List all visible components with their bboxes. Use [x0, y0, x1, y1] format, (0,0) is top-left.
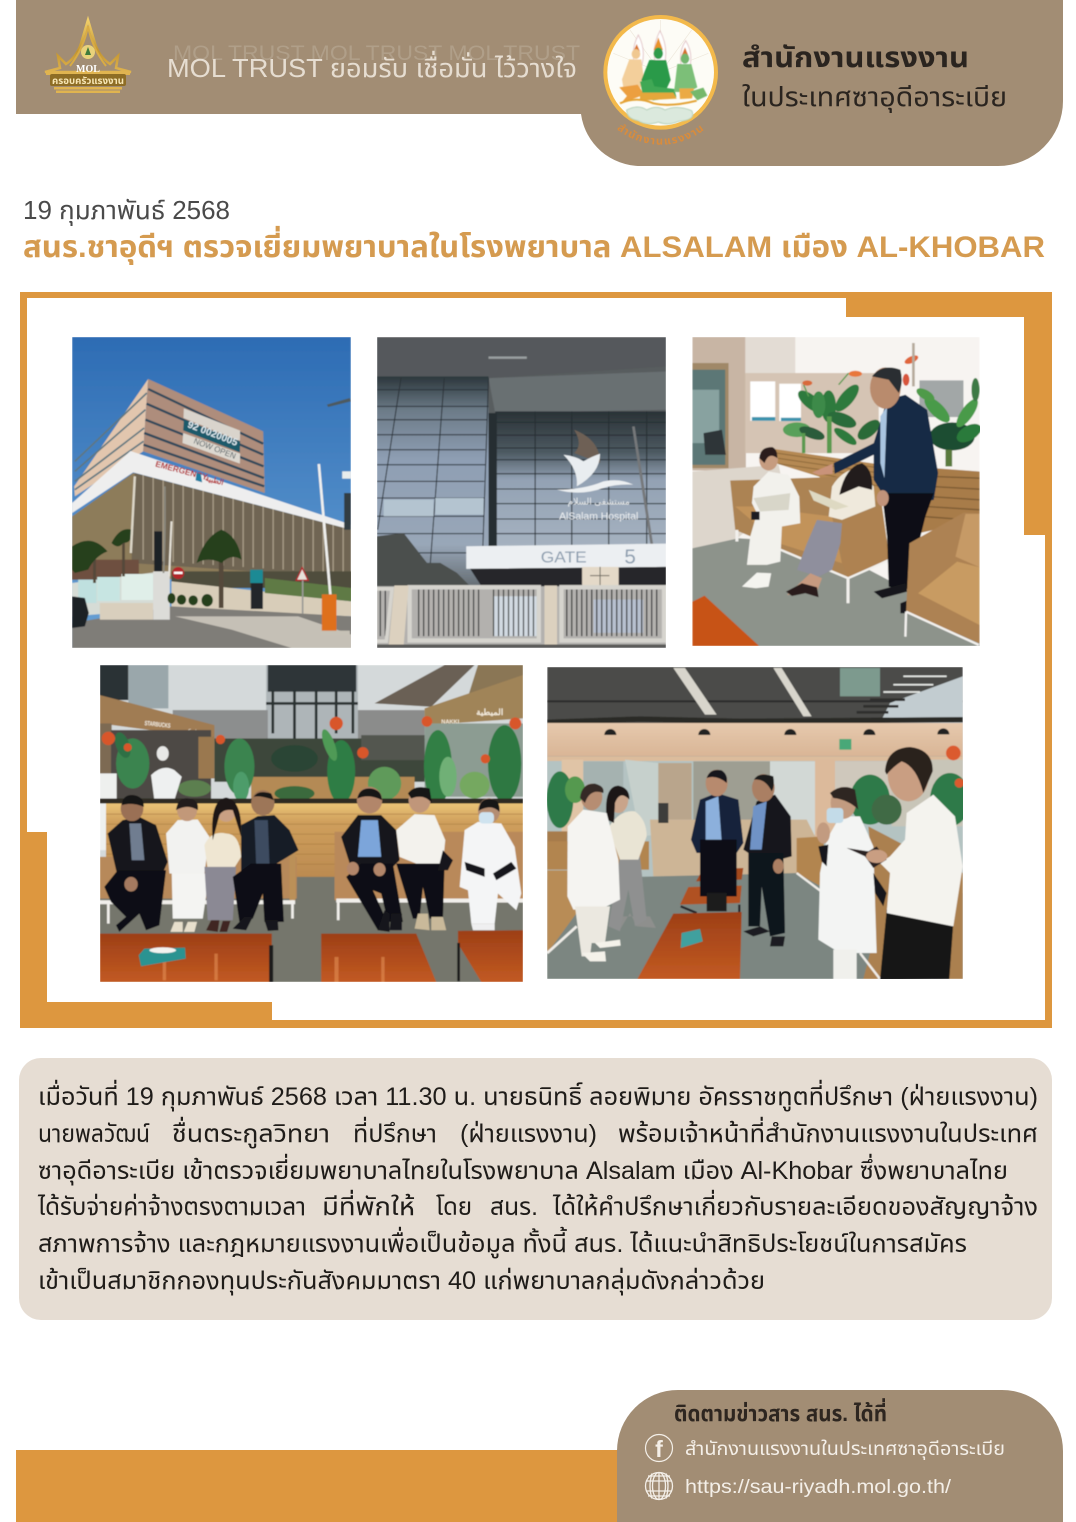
- body text: เข้าเป็นสมาชิกกองทุนประกันสังคมมาตรา 40 แก่พยาบาลกลุ่มดังกล่าวด้วย: [38, 1267, 765, 1296]
- office name: [742, 42, 1007, 113]
- footer contact panel: [617, 1390, 1063, 1522]
- plants: [547, 771, 970, 828]
- icon: office seal: สำนักงานแรงงาน: [618, 124, 704, 145]
- left glass: [377, 376, 489, 586]
- plants: [112, 725, 521, 803]
- body text: สภาพการจ้าง และกฎหมายแรงงานเพื่อเป็นข้อมูล ทั้งนี้ สนร. ได้แนะนำสิทธิประโยชน์ในการสมัคร: [38, 1226, 967, 1259]
- ghost tagline: MOL TRUST MOL TRUST MOL TRUST: [173, 42, 580, 65]
- body text: โดย: [436, 1193, 472, 1221]
- seated man 4: [233, 790, 298, 931]
- body text: ชื่นตระกูลวิทยา: [172, 1116, 330, 1149]
- lower building: [72, 473, 351, 580]
- photo: nurses reading on sofa: [692, 337, 980, 646]
- icon: globe: [646, 1472, 672, 1500]
- man in navy jacket: [812, 367, 938, 613]
- shop fascia: [100, 695, 214, 738]
- seated man 6: [396, 787, 453, 930]
- tables: [696, 868, 743, 881]
- body text: [37, 1079, 1038, 1296]
- icon: facebook: [646, 1434, 672, 1462]
- palms: [72, 529, 242, 608]
- sofa: [730, 476, 889, 578]
- photo: group standing in lobby: [547, 667, 963, 979]
- photo: group seated on benches: الميطية: [476, 707, 503, 717]
- photo: hospital exterior: 92 0020005: [186, 420, 239, 449]
- body text: ได้รับจ่ายค่าจ้างตรงตามเวลา: [37, 1193, 306, 1221]
- icon: facebook: f: [655, 1436, 663, 1462]
- hospital logo: [557, 430, 638, 523]
- photo: hospital exterior: الطبية: [204, 474, 225, 487]
- tissue box: [681, 929, 703, 948]
- body text: นายพลวัฒน์: [38, 1120, 150, 1148]
- beam: [547, 723, 963, 756]
- body text: เมื่อวันที่ 19 กุมภาพันธ์ 2568 เวลา 11.30 น. นายธนิทธิ์ ลอยพิมาย อัครราชทูตที่ปรึกษา (ฝ่ายแรงงาน): [38, 1079, 1038, 1112]
- photo: group seated on benches: STARBUCKS: [144, 720, 171, 730]
- tagline: MOL TRUST ยอมรับ เชื่อมั่น ไว้วางใจ: [167, 50, 577, 83]
- photo: hospital gate: GATE: [541, 550, 587, 567]
- body text: มีที่พักให้: [322, 1189, 415, 1221]
- tables: [100, 934, 272, 982]
- photo: hospital gate: 5: [624, 546, 636, 569]
- office name: ในประเทศซาอุดีอาระเบีย: [742, 82, 1007, 113]
- hospital logo: AlSalam Hospital: [559, 512, 638, 523]
- man in white sweater: [847, 747, 963, 980]
- office name: สำนักงานแรงงาน: [742, 42, 969, 73]
- fence: [377, 586, 666, 644]
- icon: MOL trust gold logo: MOL: [76, 64, 100, 75]
- woman in white coat: [567, 784, 656, 961]
- body text: สนร.: [490, 1193, 538, 1221]
- body text: ซาอุดีอาระเบีย เข้าตรวจเยี่ยมพยาบาลไทยในโรงพยาบาล Alsalam เมือง Al-Khobar ซึ่งพยาบาลไทย: [38, 1153, 1008, 1186]
- photo: group seated on benches: NAKKI: [441, 719, 460, 725]
- nurse: [817, 787, 877, 979]
- seated woman 3: [204, 797, 241, 932]
- photo frame: [20, 292, 1052, 1028]
- right glass: [495, 411, 666, 548]
- date: 19 กุมภาพันธ์ 2568: [23, 195, 230, 226]
- man in thobe: [100, 746, 182, 850]
- icon: office seal: [603, 15, 718, 145]
- text panel: [19, 1058, 1052, 1320]
- body text: ที่ปรึกษา: [353, 1116, 437, 1148]
- sofas: [100, 857, 297, 899]
- floor: [100, 877, 523, 982]
- woman in white coat: [742, 447, 800, 588]
- lobby: [547, 756, 963, 880]
- body text: พร้อมเจ้าหน้าที่สำนักงานแรงงานในประเทศ: [618, 1116, 1038, 1148]
- hospital logo: مستشفى السلام: [568, 497, 630, 508]
- icon: MOL trust gold logo: [45, 20, 131, 93]
- photo: hospital exterior: NOW OPEN: [192, 436, 237, 461]
- facebook page name: สำนักงานแรงงานในประเทศซาอุดีอาระเบีย: [685, 1439, 1005, 1460]
- follow heading: ติดตามข่าวสาร สนร. ได้ที่: [674, 1398, 887, 1426]
- photo: group seated on benches: ستاربكس: [181, 728, 203, 736]
- photo: group seated on benches: [100, 665, 523, 982]
- road: [72, 606, 352, 648]
- wooden wall: [106, 803, 523, 879]
- woman with book: [786, 463, 875, 597]
- table: [693, 596, 759, 646]
- body text: (ฝ่ายแรงงาน): [460, 1120, 597, 1148]
- man two: [743, 774, 792, 946]
- body text: ได้ให้คำปรึกษาเกี่ยวกับรายละเอียดของสัญญาจ้าง: [552, 1189, 1038, 1221]
- seated man 1: [104, 795, 168, 932]
- floor: [547, 873, 963, 979]
- sofas: [547, 831, 567, 861]
- armchair: [906, 513, 979, 643]
- man one: [691, 770, 743, 911]
- hedge and wall: [172, 571, 352, 588]
- website url: https://sau-riyadh.mol.go.th/: [685, 1477, 952, 1498]
- planter: [251, 777, 415, 803]
- photo: hospital exterior: [72, 337, 351, 648]
- plants: [783, 378, 984, 466]
- tissue box: [139, 948, 186, 966]
- title: สนร.ชาอุดีฯ ตรวจเยี่ยมพยาบาลในโรงพยาบาล ALSALAM เมือง AL-KHOBAR: [23, 225, 1045, 265]
- floor: [693, 465, 785, 548]
- seated nurse: [460, 798, 521, 930]
- footer bar: [16, 1450, 626, 1522]
- fence boards: [72, 572, 154, 616]
- poles and signs: [154, 531, 162, 571]
- icon: MOL trust gold logo: ครอบครัวแรงงาน: [52, 75, 124, 87]
- seated woman 2: [166, 798, 209, 932]
- planters: [775, 449, 882, 517]
- photo: hospital gate: [377, 337, 666, 648]
- tower: [74, 379, 148, 496]
- header banner: [16, 0, 1063, 166]
- photo: hospital exterior: EMERGENCY: [154, 459, 209, 482]
- gate sign: [466, 544, 666, 569]
- seated man 5: [341, 787, 403, 932]
